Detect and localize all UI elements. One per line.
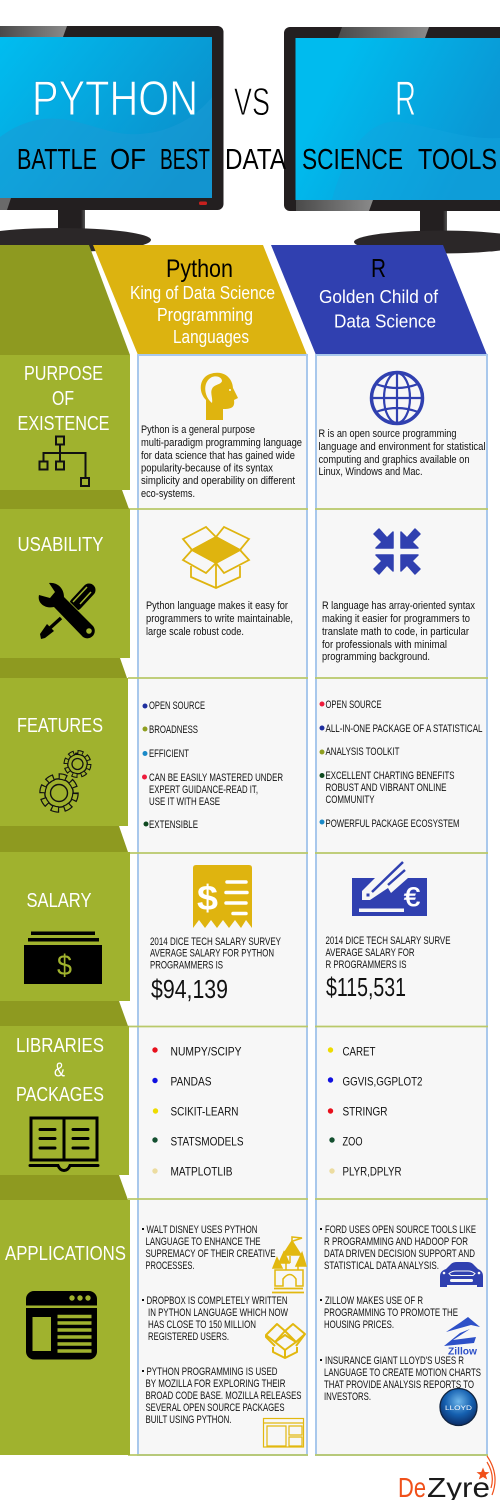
list: EXTENSIBLE [149,819,198,831]
list: PLYR,DPLYR [342,1164,402,1178]
icon: car [440,1262,483,1287]
text block: Dropbox [142,1295,289,1343]
panel: purpose Python [141,373,302,500]
header tab: Python: Python [166,255,233,283]
text block: Dropbox: HAS CLOSE TO 150 MILLION [148,1319,256,1331]
title: VS: VS [234,81,270,124]
list [149,700,283,831]
column backgrounds [128,355,488,1455]
text block: popularity-because of its syntax [141,462,273,474]
icon: globe [372,372,422,424]
text block: R PROGRAMMERS IS [326,959,406,971]
subtitle: battle of best data science tools: OF [110,144,146,176]
icon: money stack [24,932,102,984]
header tab: Python: Languages [173,326,249,347]
list: ANALYSIS TOOLKIT [326,746,400,758]
text block: computing and graphics available on [318,454,470,466]
list: PANDAS [170,1074,212,1088]
panel: features sidebar: FEATURES [17,714,103,737]
text block: programming background. [322,651,430,663]
logo: DeZyre [398,1456,495,1500]
text block [326,935,450,971]
list: STATSMODELS [170,1134,244,1148]
text block: Walt Disney: PROCESSES. [146,1260,194,1272]
subtitle: battle of best data science tools: BATTLE [17,144,97,176]
text block: Mozilla: BROAD CODE BASE. MOZILLA RELEASES [146,1390,302,1402]
text block: multi-paradigm programming language [141,437,302,449]
text block: large scale robust code. [146,626,244,638]
panel: libraries R [328,1044,423,1178]
panel: libraries sidebar: PACKAGES [16,1083,104,1106]
panel: salary sidebar [0,852,130,1026]
text block: for professionals with minimal [322,639,447,651]
header tab: R: Data Science [334,310,436,332]
text block: R is an open source programming [318,428,456,440]
icon: hierarchy [40,436,89,486]
text block: programmers to write maintainable, [146,613,293,625]
text block: Dropbox: REGISTERED USERS. [148,1331,229,1343]
text block: Lloyd: INVESTORS. [324,1391,371,1403]
bullet dots [152,1047,158,1174]
icon: Lloyd logo [440,1388,477,1426]
text block: 2014 DICE TECH SALARY SURVEY [150,936,281,948]
bullet dots [142,704,148,826]
icon: Zillow logo: Zillow [448,1346,478,1358]
list: COMMUNITY [326,794,374,806]
text block: eco-systems. [141,488,195,500]
panel: libraries Python [152,1044,244,1178]
panel: libraries sidebar: LIBRARIES [16,1034,104,1057]
text block: Mozilla: BY MOZILLA FOR EXPLORING THEIR [146,1378,286,1390]
icon: castle [272,1237,306,1292]
text block [322,600,475,663]
text block: 2014 DICE TECH SALARY SURVE [326,935,450,947]
panel: purpose sidebar: PURPOSE [24,362,103,385]
text block: making it easier for programmers to [322,613,470,625]
text block: Dropbox: IN PYTHON LANGUAGE WHICH NOW [148,1307,289,1319]
text block: Linux, Windows and Mac. [318,466,422,478]
panel: usability Python [146,527,293,638]
list: CARET [342,1044,376,1058]
text block: translate math to code, in particular [322,626,469,638]
icon: open box [183,527,249,588]
text block: AVERAGE SALARY FOR [326,947,415,959]
text block: AVERAGE SALARY FOR PYTHON [150,948,274,960]
header tab: R [271,245,487,355]
icon: browser window [26,1291,97,1360]
panel: usability sidebar: USABILITY [18,533,104,556]
text block: Zillow: HOUSING PRICES. [324,1319,394,1331]
icon: wrench and screwdriver [39,583,95,639]
text block: for data science that has gained wide [141,450,295,462]
list: MATPLOTLIB [170,1164,232,1178]
panel: libraries sidebar [0,1026,129,1200]
list [326,699,482,830]
icon: gears [42,752,89,810]
list: CAN BE EASILY MASTERED UNDER [149,772,283,784]
icon: Lloyd logo: LLOYD [445,1405,472,1412]
subtitle: battle of best data science tools: BEST [160,144,210,176]
header tab: blank olive [0,245,130,355]
list: EXCELLENT CHARTING BENEFITS [326,770,454,782]
text block: Mozilla: PYTHON PROGRAMMING IS USED [146,1366,278,1378]
panel: applications R [320,1224,483,1426]
icon: receipt: $ [197,879,218,918]
icon: cheque: € [404,882,420,912]
header tab: R: R [371,253,386,283]
panel: salary R [326,862,450,1002]
text block: Python is a general purpose [141,424,255,436]
header tab: Python [93,245,307,355]
icon: layout window [264,1418,304,1447]
text block: Walt Disney: LANGUAGE TO ENHANCE THE [146,1236,260,1248]
monitor: Python [0,26,224,252]
panel: salary Python [150,865,281,1004]
text block [141,424,302,500]
panel: features sidebar [0,678,128,852]
list: GGVIS,GGPLOT2 [342,1074,423,1088]
list [170,1044,244,1178]
icon: dropbox [266,1324,305,1358]
list: USE IT WITH EASE [149,796,220,808]
salary figure: $115,531 [326,974,406,1002]
list: BROADNESS [149,724,198,736]
icon: four inward arrows [374,529,420,574]
panel: usability R [322,529,475,663]
panel: purpose sidebar: OF [52,387,74,410]
list: NUMPY/SCIPY [170,1044,242,1058]
panel: purpose sidebar [0,355,130,509]
panel: applications sidebar: APPLICATIONS [5,1242,126,1265]
text block: Dropbox: DROPBOX IS COMPLETELY WRITTEN [146,1295,288,1307]
list: OPEN SOURCE [149,700,205,712]
list: STRINGR [342,1104,388,1118]
list: SCIKIT-LEARN [170,1104,238,1118]
panel: salary sidebar: SALARY [26,889,92,912]
icon: Zillow logo [444,1317,480,1358]
subtitle: battle of best data science tools: SCIENCE [302,144,403,176]
icon: money stack: $ [57,950,72,982]
text block: Mozilla: BUILT USING PYTHON. [146,1414,232,1426]
monitor: R [284,27,500,254]
title: PYTHON: PYTHON [32,72,198,126]
list: EXPERT GUIDANCE-READ IT, [149,784,258,796]
list: ROBUST AND VIBRANT ONLINE [326,782,446,794]
text block [150,936,281,972]
text block: Walt Disney [142,1224,276,1272]
text block [146,600,293,638]
panel: applications Python [142,1224,306,1447]
list: OPEN SOURCE [326,699,382,711]
icon: open book [30,1118,98,1170]
panel: purpose sidebar: EXISTENCE [18,412,110,435]
text block: Walt Disney: WALT DISNEY USES PYTHON [146,1224,258,1236]
text block: Walt Disney: SUPREMACY OF THEIR CREATIVE [146,1248,276,1260]
list [342,1044,423,1178]
text block: Python language makes it easy for [146,600,288,612]
list: ZOO [342,1134,362,1148]
text block: Zillow: ZILLOW MAKES USE OF R [325,1295,423,1307]
header tab: R: Golden Child of [319,286,439,307]
panel: features R [320,699,482,830]
panel: applications sidebar [0,1200,130,1455]
salary figure: $94,139 [151,976,228,1004]
text block: simplicity and operability on different [141,475,296,487]
header tab: Python: Programming [157,304,253,325]
bullet dots [320,702,324,824]
text block: Ford: STATISTICAL DATA ANALYSIS. [324,1260,439,1272]
panel: features Python [142,700,283,831]
text block: PROGRAMMERS IS [150,960,223,972]
panel: usability sidebar [0,509,130,678]
title: R: R [395,72,416,126]
list: EFFICIENT [149,748,189,760]
bullet dots [328,1047,335,1174]
text block: Mozilla [142,1366,302,1426]
panel: purpose R [318,372,486,478]
header tab: Python: King of Data Science [130,282,275,303]
subtitle: battle of best data science tools: DATA [225,144,287,176]
text block: Mozilla: SEVERAL OPEN SOURCE PACKAGES [146,1402,284,1414]
text block: Zillow [320,1295,458,1331]
icon: head [201,373,238,420]
subtitle: battle of best data science tools [17,144,497,176]
panel: libraries sidebar: & [54,1058,65,1082]
text block [318,428,486,478]
text block: Ford [320,1224,476,1272]
text block: Lloyd [320,1355,481,1403]
